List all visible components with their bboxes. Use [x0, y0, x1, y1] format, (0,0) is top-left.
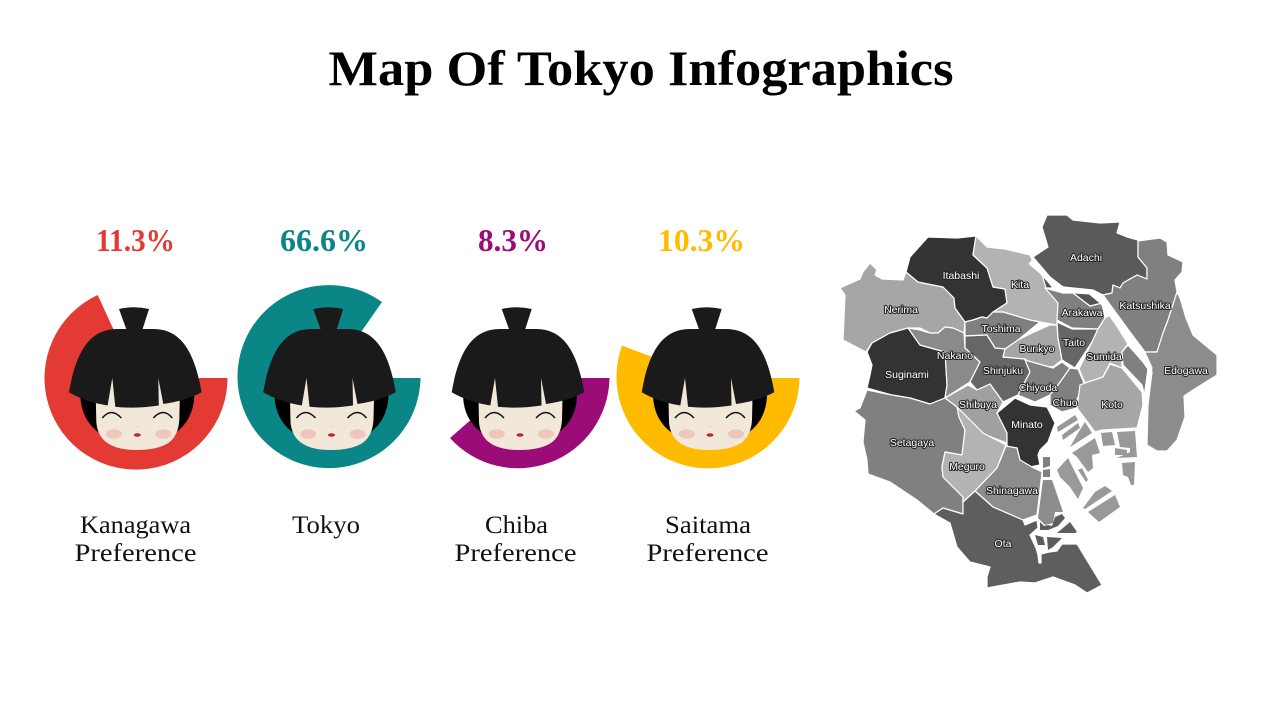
- label: Tokyo: Tokyo: [292, 512, 360, 539]
- icon: kokeshi face: [263, 307, 396, 450]
- ward labels: Setagaya: [890, 437, 934, 449]
- ward labels: Taito: [1063, 337, 1085, 349]
- bay islands: [1035, 415, 1137, 550]
- ward shapes: [840, 215, 1217, 593]
- ward labels: Meguro: [949, 461, 985, 473]
- ward labels: Chuo: [1052, 397, 1078, 409]
- map of Tokyo wards: [840, 215, 1217, 593]
- label: Saitama Preference: Preference: [646, 540, 768, 567]
- ward labels: Shinagawa: [986, 485, 1038, 497]
- ward labels: Chiyoda: [1019, 382, 1057, 394]
- percentage: 66.6%: 66.6%: [280, 222, 368, 258]
- ward labels: Toshima: [981, 323, 1021, 335]
- river: [1030, 262, 1150, 440]
- icon: kokeshi face: [69, 307, 202, 450]
- percentage: 10.3%: 10.3%: [658, 222, 745, 258]
- ward labels: Adachi: [1070, 252, 1102, 264]
- ring chart: Saitama: [617, 346, 800, 468]
- stat: Kanagawa: [45, 222, 228, 567]
- label: Chiba Preference: Chiba: [485, 512, 548, 539]
- label: Kanagawa Preference: Preference: [74, 540, 196, 567]
- percentage: 11.3%: 11.3%: [96, 222, 175, 258]
- ward labels: Koto: [1101, 399, 1123, 411]
- ward labels: Nakano: [937, 350, 973, 362]
- ward labels: Shinjuku: [983, 365, 1023, 377]
- ring chart: Tokyo: [238, 285, 420, 468]
- stat: Saitama: [617, 222, 800, 567]
- ward labels: Minato: [1011, 419, 1043, 431]
- ward labels: Bunkyo: [1019, 343, 1055, 355]
- stat: Tokyo: [238, 222, 420, 539]
- ring chart: Chiba: [450, 378, 610, 468]
- ward labels: Ota: [995, 538, 1012, 550]
- stat: Chiba: [450, 222, 610, 567]
- ward labels: Nerima: [884, 304, 918, 316]
- ring chart: Kanagawa: [45, 295, 228, 470]
- ward labels: Suginami: [885, 369, 929, 381]
- ward labels: Sumida: [1086, 351, 1122, 363]
- icon: kokeshi face: [642, 307, 774, 450]
- title: Map Of Tokyo Infographics: [328, 40, 954, 96]
- ward labels: [884, 252, 1208, 550]
- ward labels: Katsushika: [1119, 300, 1171, 312]
- ward labels: Itabashi: [943, 270, 979, 282]
- ward labels: Shibuya: [959, 399, 997, 411]
- ward labels: Arakawa: [1062, 307, 1103, 319]
- label: Chiba Preference: Preference: [454, 540, 576, 567]
- label: Saitama Preference: Saitama: [665, 512, 751, 539]
- percentage: 8.3%: 8.3%: [478, 222, 548, 258]
- label: Kanagawa Preference: Kanagawa: [80, 512, 191, 539]
- ward labels: Edogawa: [1164, 365, 1208, 377]
- ward labels: Kita: [1011, 279, 1029, 291]
- icon: kokeshi face: [452, 307, 584, 450]
